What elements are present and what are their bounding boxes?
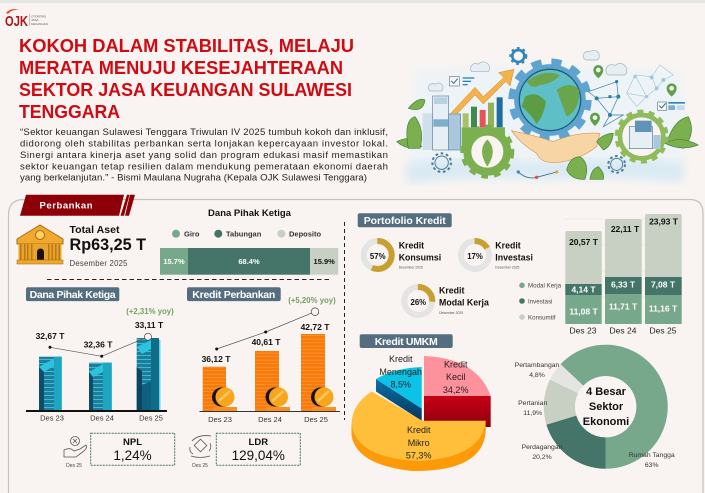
chart: Kredit UMKM 3D pie: Menengah [379,367,422,377]
chart: 4 Besar Sektor Ekonomi donut: Sektor [589,401,624,413]
pill heading: Kredit UMKM: Kredit UMKM [375,336,438,348]
donut: Kredit Investasi: 17% [467,252,483,261]
chart: Kredit coin bars: Des 23 [208,415,232,424]
icon: clouds [428,50,627,91]
chart: stacked bars portofolio: Des 24 [610,326,637,336]
label: LDR date: Des 25 [192,463,208,469]
chart: Kredit coin bars: 40,61 T [252,337,281,347]
chart: stacked bars portofolio: 23,93 T [649,216,679,226]
chart: rising bars [463,97,503,127]
chart: 4 Besar Sektor Ekonomi donut: Ekonomi [583,416,629,428]
chart: DPK buildings: Des 24 [90,414,114,422]
legend: DPK [172,230,322,238]
logo: OJK: JASA [31,18,39,22]
stacked bar: DPK composition: 15.7% [163,257,185,266]
donut: Kredit Konsumsi: Konsumsi [399,252,441,262]
legend: DPK: Tabungan [226,230,262,238]
pill heading: Dana Pihak Ketiga: Dana Pihak Ketiga [30,289,116,301]
chart: DPK buildings [26,307,174,422]
icon: globe gear [513,63,587,137]
total aset: Rp63,25 T [70,235,147,254]
donut: Kredit Modal Kerja [404,286,489,315]
chart: stacked bars portofolio: Des 25 [650,326,677,336]
chart: Kredit UMKM 3D pie [352,354,491,471]
pill heading: Kredit UMKM [360,334,453,348]
chart: Kredit coin bars [200,296,340,424]
chart: stacked bars portofolio: 4,14 T [571,285,596,295]
chart: 4 Besar Sektor Ekonomi donut: 4 Besar [586,386,627,398]
chart: stacked bars portofolio: 6,33 T [611,280,636,290]
donut: Kredit Investasi [461,240,533,270]
title: TENGGARA [19,101,120,122]
chart: DPK buildings: 33,11 T [135,320,164,330]
chart: DPK buildings: Des 23 [40,414,64,422]
icon: green gear with leaf [462,127,512,176]
logo: OJK: OJK [5,13,28,30]
legend: portofolio stacked bars: Investasi [528,298,552,306]
icon: map pins [590,65,677,126]
arrow: growth [451,69,514,115]
icon: NPL hand and coin [64,436,87,457]
chart: 4 Besar Sektor Ekonomi donut: Rumah Tangga [629,452,675,459]
logo: OJK: KEUANGAN [31,22,48,26]
chart: 4 Besar Sektor Ekonomi donut: Pertanian [518,400,547,407]
chart: stacked bars portofolio: 11,16 T [649,304,678,314]
pill heading: Kredit Perbankan: Kredit Perbankan [192,289,275,301]
stacked bar: DPK composition: 68.4% [238,257,260,266]
donut: Kredit Modal Kerja: 26% [410,298,426,307]
chart: 4 Besar Sektor Ekonomi donut [515,345,675,469]
chart: DPK buildings: (+2,31% yoy) [126,307,174,316]
stacked bar: DPK composition [160,248,338,275]
icon: outline gears [432,153,625,173]
chart: Kredit UMKM 3D pie: 8,5% [390,380,411,390]
legend: portofolio stacked bars: Modal Kerja [528,282,562,290]
chart: Kredit UMKM 3D pie: Kredit [389,354,413,364]
stat box: LDR: 129,04% [232,448,285,463]
stacked bar: DPK composition: 15.9% [314,257,335,266]
donut: Kredit Modal Kerja: Modal Kerja [439,298,489,308]
title: SEKTOR JASA KEUANGAN SULAWESI [19,79,352,100]
donut: Kredit Konsumsi: Kredit [399,240,424,250]
stat box: LDR [216,433,300,465]
chart: Kredit coin bars: (+5,20% yoy) [288,296,336,305]
section banner: Perbankan: Perbankan [40,200,93,212]
icon: checklists [449,77,685,110]
title: MERATA MENUJU KESEJAHTERAAN [19,57,343,78]
quote text block: didorong oleh stabilitas perbankan serta lonjakan kepercayaan investor lokal. [20,138,388,150]
chart: 4 Besar Sektor Ekonomi donut: 63% [645,462,659,469]
chart: Kredit UMKM 3D pie: Kecil [446,372,465,382]
quote text block [20,127,388,184]
panel frame: main content [8,200,703,493]
donut: Kredit Konsumsi: Desember 2025 [399,266,423,270]
donut: Kredit Modal Kerja: Kredit [439,286,464,296]
total aset: Desember 2025 [70,259,128,268]
chart: stacked bars portofolio: 7,08 T [651,280,676,290]
chart: stacked bars portofolio [565,214,682,336]
chart: DPK buildings: 32,67 T [36,331,65,341]
icon: small gear [512,50,524,62]
legend: portofolio stacked bars: Konsumtif [528,314,556,322]
chart: 4 Besar Sektor Ekonomi donut: 4,8% [529,372,545,379]
icon: bank building [17,225,63,264]
chart: Kredit UMKM 3D pie: 57,3% [406,450,431,460]
chart: DPK buildings: 32,36 T [84,340,113,350]
stat box: NPL [91,433,175,465]
legend: portofolio stacked bars [519,282,562,322]
pill heading: Portofolio Kredit: Portofolio Kredit [364,215,446,227]
icon: server buildings [423,96,461,150]
section banner: Perbankan [20,195,135,216]
stat box: LDR: LDR [249,437,268,448]
chart: DPK buildings: Des 25 [139,414,163,422]
title [19,35,354,122]
chart: Kredit coin bars: Des 24 [258,415,282,424]
donut: Kredit Investasi: Investasi [495,252,533,262]
chart: 4 Besar Sektor Ekonomi donut: 11,9% [523,410,542,417]
legend: DPK: Deposito [289,230,322,238]
divider horizontal [47,278,330,280]
icon: LDR exchange [190,436,211,458]
logo: OJK [5,9,48,30]
quote text block: yang berkelanjutan.” - Bismi Maulana Nugraha (Kepala OJK Sulawesi Tenggara) [20,172,367,184]
stat box: NPL: 1,24% [113,448,152,463]
donut: Kredit Modal Kerja: Desember 2025 [439,311,463,315]
network diagram [588,80,623,127]
logo: OJK: OTORITAS [31,14,46,18]
chart: Kredit UMKM 3D pie: Mikro [408,438,430,448]
title: KOKOH DALAM STABILITAS, MELAJU [19,35,354,56]
chart: Kredit UMKM 3D pie: Kredit [407,425,431,435]
donut: Kredit Konsumsi [364,240,441,270]
icon: right green gear and machine [617,112,667,162]
chart: stacked bars portofolio: 20,57 T [569,237,599,247]
total aset: Total Aset [70,224,120,236]
quote text block: Sinergi antara kinerja aset yang solid dan program edukasi masif memastikan [20,150,388,161]
quote text block: “Sektor keuangan Sulawesi Tenggara Triwulan IV 2025 tumbuh kokoh dan inklusif, [20,127,388,138]
chart: Kredit coin bars: 42,72 T [301,322,330,332]
icon: leaves [397,99,698,179]
donut: Kredit Investasi: Desember 2025 [495,266,520,270]
chart: 4 Besar Sektor Ekonomi donut: 20,2% [532,454,552,461]
icon: hand [512,131,600,163]
donut: Kredit Konsumsi: 57% [370,252,386,261]
small wave chart [518,172,557,178]
chart: Kredit UMKM 3D pie: Kredit [444,360,468,370]
label: NPL date: Des 25 [66,463,82,469]
chart: 4 Besar Sektor Ekonomi donut: Perdagangan [522,444,563,451]
illustration: globe, hand, gears and growth arrow [397,48,698,183]
divider vertical [344,222,346,420]
chart: stacked bars portofolio: 11,71 T [609,302,638,312]
chart: Kredit coin bars: 36,12 T [202,354,231,364]
heading: Dana Pihak Ketiga: Dana Pihak Ketiga [208,208,292,219]
chart: stacked bars portofolio: Des 23 [570,326,597,336]
chart: stacked bars portofolio: 22,11 T [611,224,640,234]
quote text block: sektor keuangan tetap resilien dalam mendukung pemerataan ekonomi daerah [20,162,388,172]
legend: DPK: Giro [184,230,200,238]
total aset [70,224,147,268]
stat box: NPL: NPL [123,437,142,448]
chart: 4 Besar Sektor Ekonomi donut: Pertambangan [515,362,560,369]
chart: stacked bars portofolio: 11,08 T [569,306,598,316]
chart: Kredit coin bars: Des 25 [304,415,328,424]
chart: Kredit UMKM 3D pie: 34,2% [443,385,468,395]
donut: Kredit Investasi: Kredit [495,240,521,250]
